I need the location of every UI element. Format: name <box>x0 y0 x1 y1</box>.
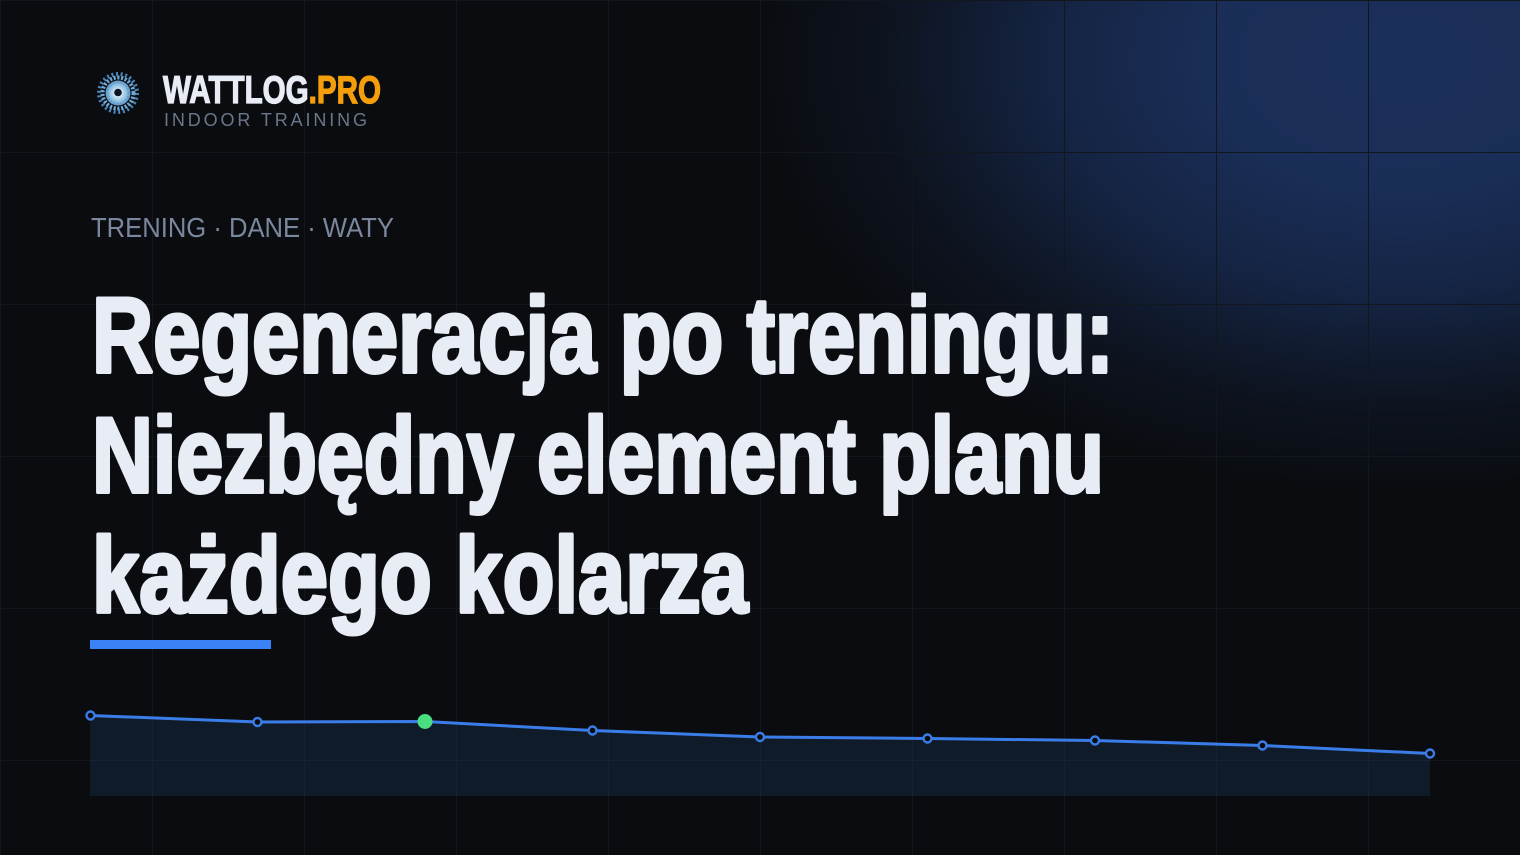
logo <box>99 69 381 130</box>
title accent underline <box>90 640 271 649</box>
title <box>92 275 1114 635</box>
tagline: INDOOR TRAINING <box>164 110 367 130</box>
icon: cycling cassette <box>99 74 137 112</box>
chart line <box>90 716 1430 754</box>
highlighted data point <box>418 714 432 729</box>
data points <box>86 712 1434 758</box>
title: Niezbędny element planu <box>92 395 1104 515</box>
category line: TRENING · DANE · WATY <box>91 212 394 243</box>
title: Regeneracja po treningu: <box>92 275 1114 395</box>
wordmark: WATTLOG.PRO <box>163 69 381 112</box>
title: każdego kolarza <box>92 515 749 635</box>
line chart <box>86 712 1434 796</box>
chart area fill <box>90 716 1430 796</box>
